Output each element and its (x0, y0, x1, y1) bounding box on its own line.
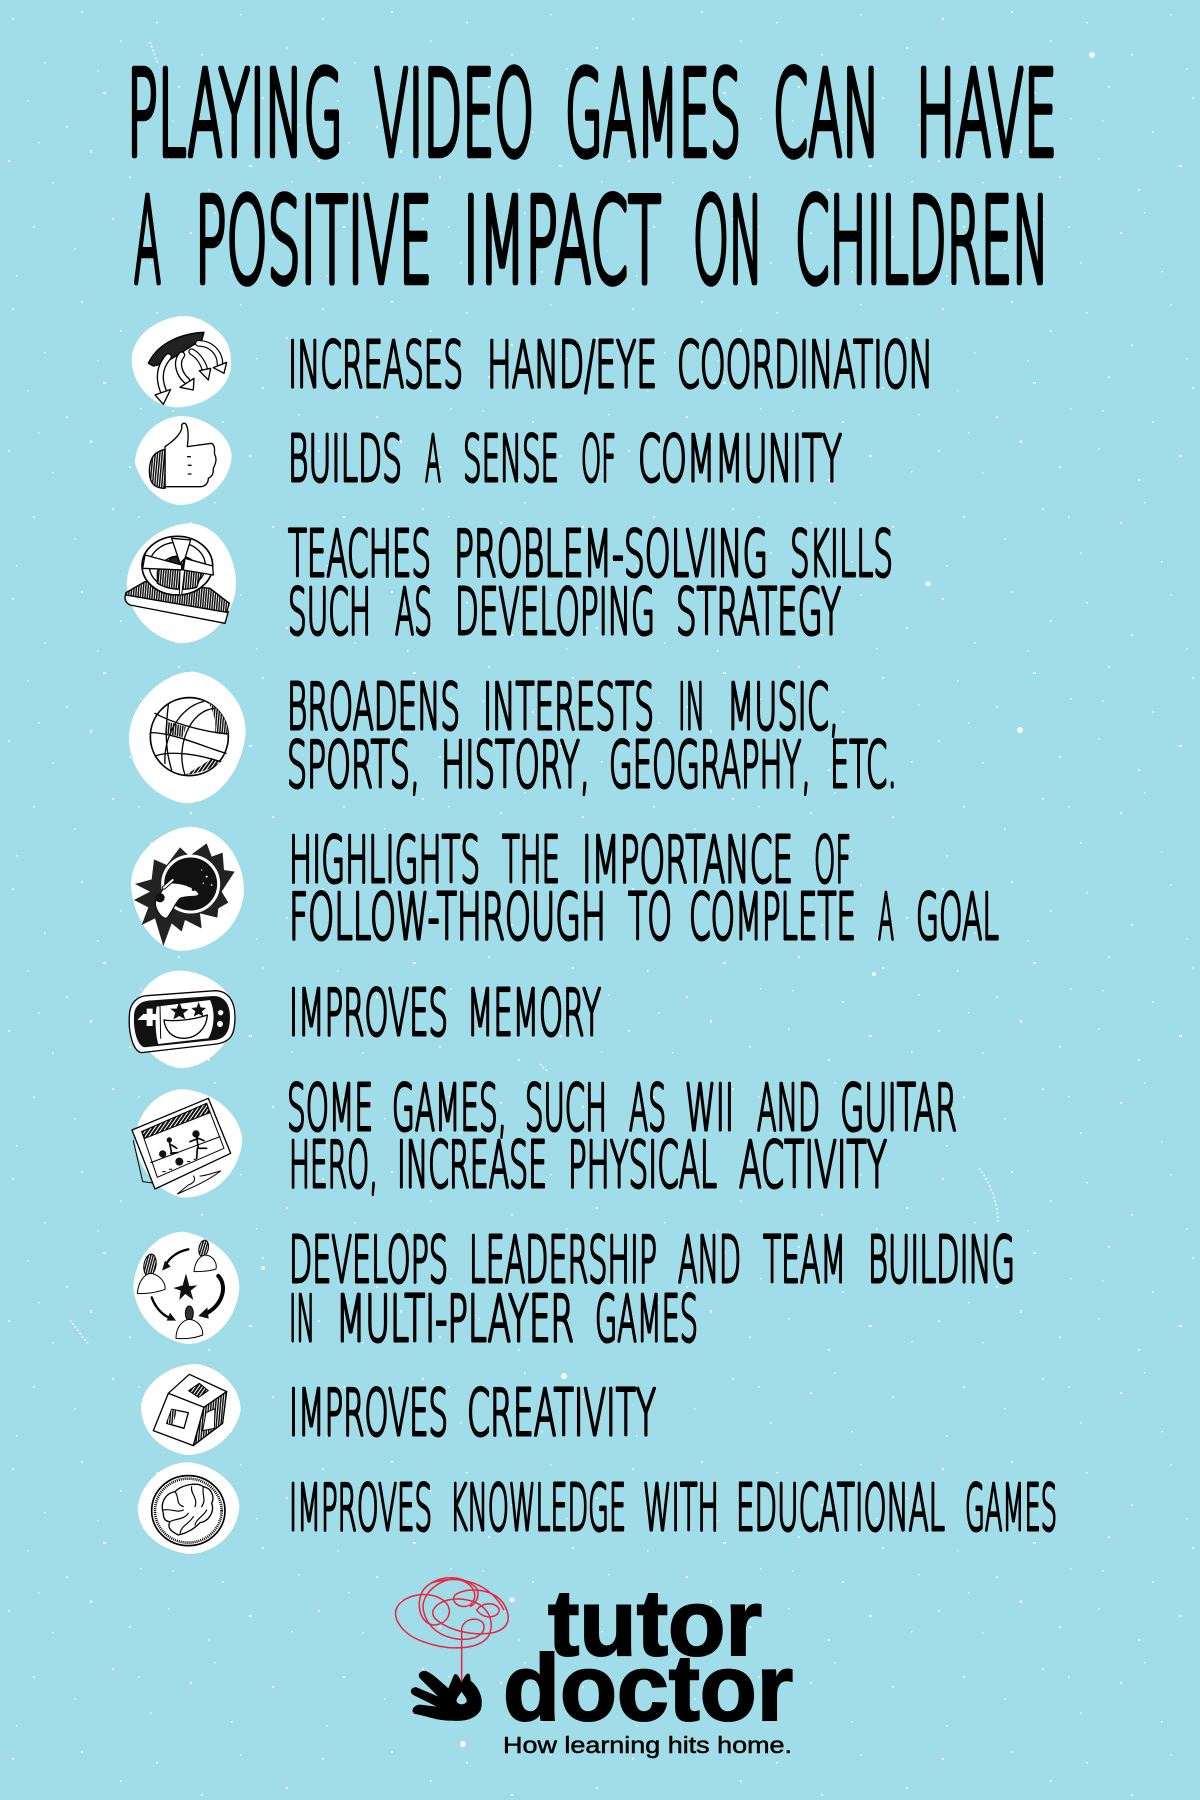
text: develops leadership: AND (678, 1224, 741, 1298)
text: broadens interests: SPORTS, (287, 729, 420, 803)
text: teaches problem-solving skills (288, 518, 893, 650)
text: builds a sense of community: BUILDS (288, 423, 402, 497)
icon: brain in a coin (138, 1462, 239, 1554)
text: ETC. (830, 729, 897, 803)
text: develops leadership: TEAM (763, 1224, 846, 1298)
icon: UFO with arrows (132, 316, 231, 407)
text: highlights follow-through: TO (628, 881, 672, 955)
text: increases hand/eye coordination (288, 329, 933, 403)
icon: cube (141, 1364, 241, 1455)
text: develops leadership: IN (289, 1283, 315, 1357)
text: teaches problem-solving skills: PROBLEM-SOLVING (454, 518, 768, 592)
title line 1: GAMES (565, 45, 741, 183)
text: broadens interests: INTERESTS (483, 671, 654, 745)
text: highlights follow-through: IMPORTANCE (582, 824, 793, 898)
text: builds a sense of community: COMMUNITY (638, 423, 842, 497)
text: teaches problem-solving skills: AS (395, 576, 432, 650)
icon: thumbs up (135, 416, 232, 505)
list item: problem-solving (125, 518, 893, 650)
list item: follow-through (131, 824, 999, 955)
icon: game controller burst (131, 827, 244, 951)
text: some games, wii and guitar hero: INCREASE (397, 1129, 547, 1203)
text: highlights follow-through: THE (502, 824, 560, 898)
wordmark: doctor: doctor (503, 1635, 793, 1740)
wordmark: tutor: tutor (548, 1570, 762, 1675)
title line 1: CAN (773, 45, 880, 183)
list item: leadership (133, 1224, 1015, 1357)
text: improves knowledge: KNOWLEDGE (450, 1472, 626, 1546)
title line 1 (127, 45, 1057, 183)
text: increases hand/eye coordination: INCREASES (288, 329, 463, 403)
icon: steering wheel on console (125, 523, 236, 643)
text: develops leadership: GAMES (595, 1283, 698, 1357)
text: broadens interests: BROADENS (287, 671, 460, 745)
icon: red scribble brain and hand (396, 1578, 508, 1721)
text: builds a sense of community: OF (581, 423, 616, 497)
text: teaches problem-solving skills: DEVELOPING (455, 576, 655, 650)
list item: physical activity (132, 1072, 957, 1203)
text: teaches problem-solving skills: SUCH (288, 576, 371, 650)
text: improves creativity: IMPROVES (289, 1377, 448, 1451)
title line 2 (134, 172, 1049, 310)
icon: handheld console with smiling face (129, 971, 236, 1068)
title line 1: PLAYING (127, 45, 343, 183)
icon: monitor with running figures (132, 1089, 242, 1198)
text: highlights follow-through: COMPLETE (689, 881, 856, 955)
text: increases hand/eye coordination: COORDINATION (677, 329, 933, 403)
text: broadens interests: GEOGRAPHY, (609, 729, 811, 803)
text: improves knowledge: IMPROVES (289, 1472, 432, 1546)
text: teaches problem-solving skills: STRATEGY (676, 576, 841, 650)
text: MEMORY (467, 977, 601, 1051)
text: improves knowledge: WITH (643, 1472, 719, 1546)
title line 2: ON (693, 172, 763, 310)
logo: tutor doctor (396, 1570, 793, 1758)
tagline: How learning hits home. (503, 1732, 792, 1758)
text: some games, wii and guitar hero: SUCH (525, 1072, 607, 1146)
text: improves knowledge (289, 1472, 1057, 1546)
list item: hand/eye coordination (132, 316, 933, 407)
text: improves memory: IMPROVES (289, 977, 448, 1051)
list item: improves memory (129, 971, 601, 1068)
text: GUITAR (840, 1072, 957, 1146)
text: develops leadership: DEVELOPS (289, 1224, 448, 1298)
text: develops leadership: MULTI-PLAYER (336, 1283, 574, 1357)
text: some games, wii and guitar hero: HERO, (289, 1129, 378, 1203)
list item: creativity (141, 1364, 656, 1455)
text: builds a sense of community: A (425, 423, 441, 497)
text: highlights follow-through: OF (814, 824, 851, 898)
text: some games, wii and guitar hero: ACTIVITY (739, 1129, 887, 1203)
title (127, 45, 1057, 310)
text: develops leadership: LEADERSHIP (469, 1224, 657, 1298)
text: builds a sense of community (288, 423, 842, 497)
text: highlights follow-through: FOLLOW-THROUGH (289, 881, 606, 955)
icon: team with star and arrows (133, 1232, 239, 1344)
text: some games, wii and guitar hero: PHYSICAL (568, 1129, 717, 1203)
text: BUILDING (868, 1224, 1015, 1298)
text: some games, wii and guitar hero: AS (629, 1072, 666, 1146)
icon: globe (129, 672, 246, 803)
text: highlights follow-through: HIGHLIGHTS (289, 824, 480, 898)
text: highlights follow-through: A (878, 881, 894, 955)
text: broadens interests: HISTORY, (441, 729, 590, 803)
text: broadens interests (287, 671, 897, 803)
title line 1: VIDEO (374, 45, 534, 183)
title line 2: POSITIVE (195, 172, 432, 310)
list item: sense of community (135, 416, 842, 505)
text: improves knowledge: EDUCATIONAL (736, 1472, 945, 1546)
text: teaches problem-solving skills: TEACHES (288, 518, 431, 592)
text: increases hand/eye coordination: HAND/EYE (487, 329, 657, 403)
text: SKILLS (790, 518, 893, 592)
text: broadens interests: IN (678, 671, 705, 745)
text: improves creativity: CREATIVITY (467, 1377, 656, 1451)
text: some games, wii and guitar hero: GAMES, (392, 1072, 507, 1146)
title line 2: A (134, 172, 161, 310)
text: builds a sense of community: SENSE (463, 423, 559, 497)
text: broadens interests: MUSIC, (727, 671, 839, 745)
text: some games, wii and guitar hero: SOME (287, 1072, 373, 1146)
text: some games, wii and guitar hero (287, 1072, 957, 1203)
text: GOAL (916, 881, 999, 955)
list item: knowledge (138, 1462, 1057, 1554)
text: some games, wii and guitar hero: AND (757, 1072, 820, 1146)
text: highlights follow-through (289, 824, 999, 955)
list item: broadens interests (129, 671, 897, 803)
text: develops leadership (289, 1224, 1015, 1357)
text: GAMES (965, 1472, 1057, 1546)
title line 2: IMPACT (463, 172, 661, 310)
text: some games, wii and guitar hero: WII (685, 1072, 734, 1146)
